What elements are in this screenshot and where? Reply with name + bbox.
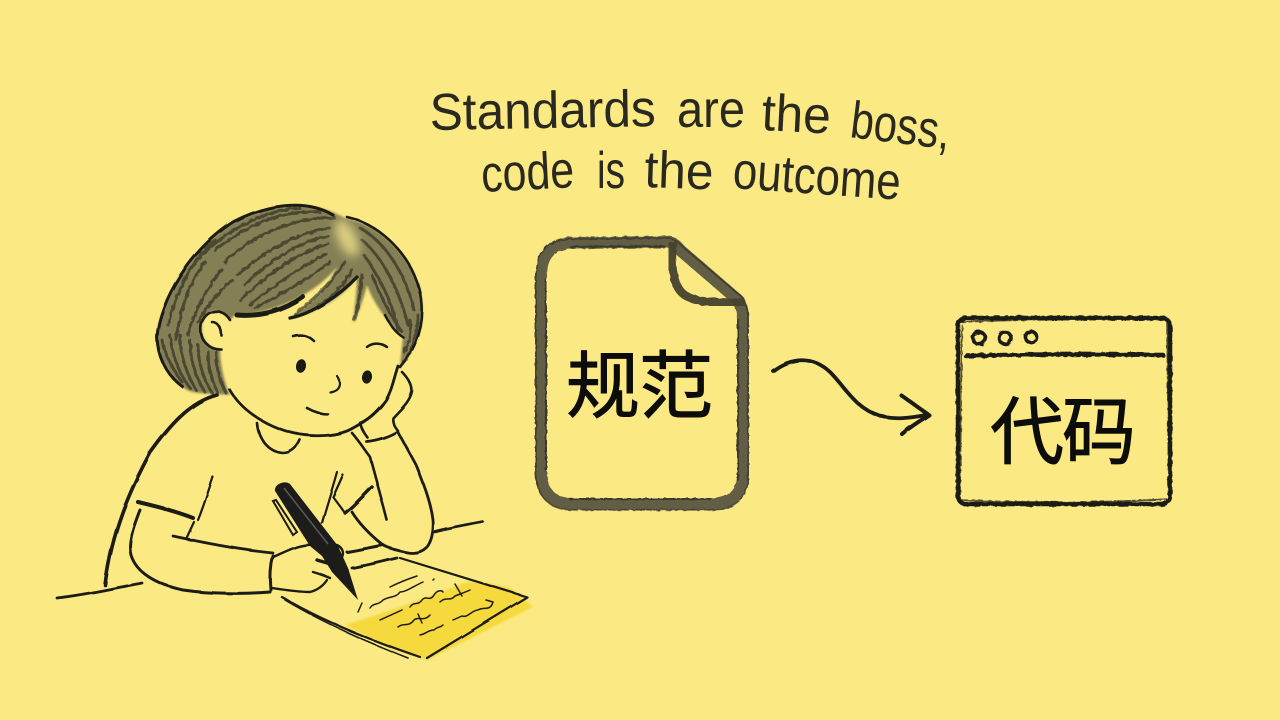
nose (330, 376, 339, 392)
title: boss, (848, 91, 954, 161)
title: the (644, 141, 715, 201)
eyes (295, 358, 373, 384)
desk edge (57, 583, 142, 598)
arrow (773, 360, 929, 434)
title (429, 80, 954, 212)
illustration: girl writing at a desk (57, 205, 533, 660)
pen (273, 482, 358, 600)
hair outline (157, 205, 422, 387)
body and arms (57, 372, 483, 598)
right arm (352, 433, 387, 520)
title: outcome (731, 142, 903, 212)
mouth (307, 408, 328, 414)
face (201, 311, 398, 436)
hair (157, 205, 422, 395)
collar (257, 423, 300, 453)
document label: 规范 (566, 345, 713, 428)
window buttons (973, 332, 985, 344)
browser window icon (958, 318, 1170, 504)
window label: 代码 (990, 391, 1136, 474)
left sleeve (138, 502, 193, 518)
title: the (760, 84, 832, 146)
propping hand (360, 372, 412, 438)
title: Standards (429, 80, 656, 142)
left arm (130, 510, 270, 593)
crown highlight (330, 216, 364, 260)
right sleeve (322, 472, 345, 523)
eyebrows (293, 335, 387, 347)
ear (201, 311, 230, 349)
face outline (230, 366, 398, 436)
highlighted paper area (345, 582, 533, 660)
title bar divider (966, 354, 1163, 356)
title: code (480, 141, 576, 204)
title: is (597, 142, 625, 200)
paper with notes (282, 558, 533, 660)
title: are (677, 81, 745, 139)
writing hand (273, 544, 343, 557)
shoulder (105, 395, 217, 585)
handwritten scribbles (358, 576, 493, 635)
document icon (536, 238, 748, 510)
